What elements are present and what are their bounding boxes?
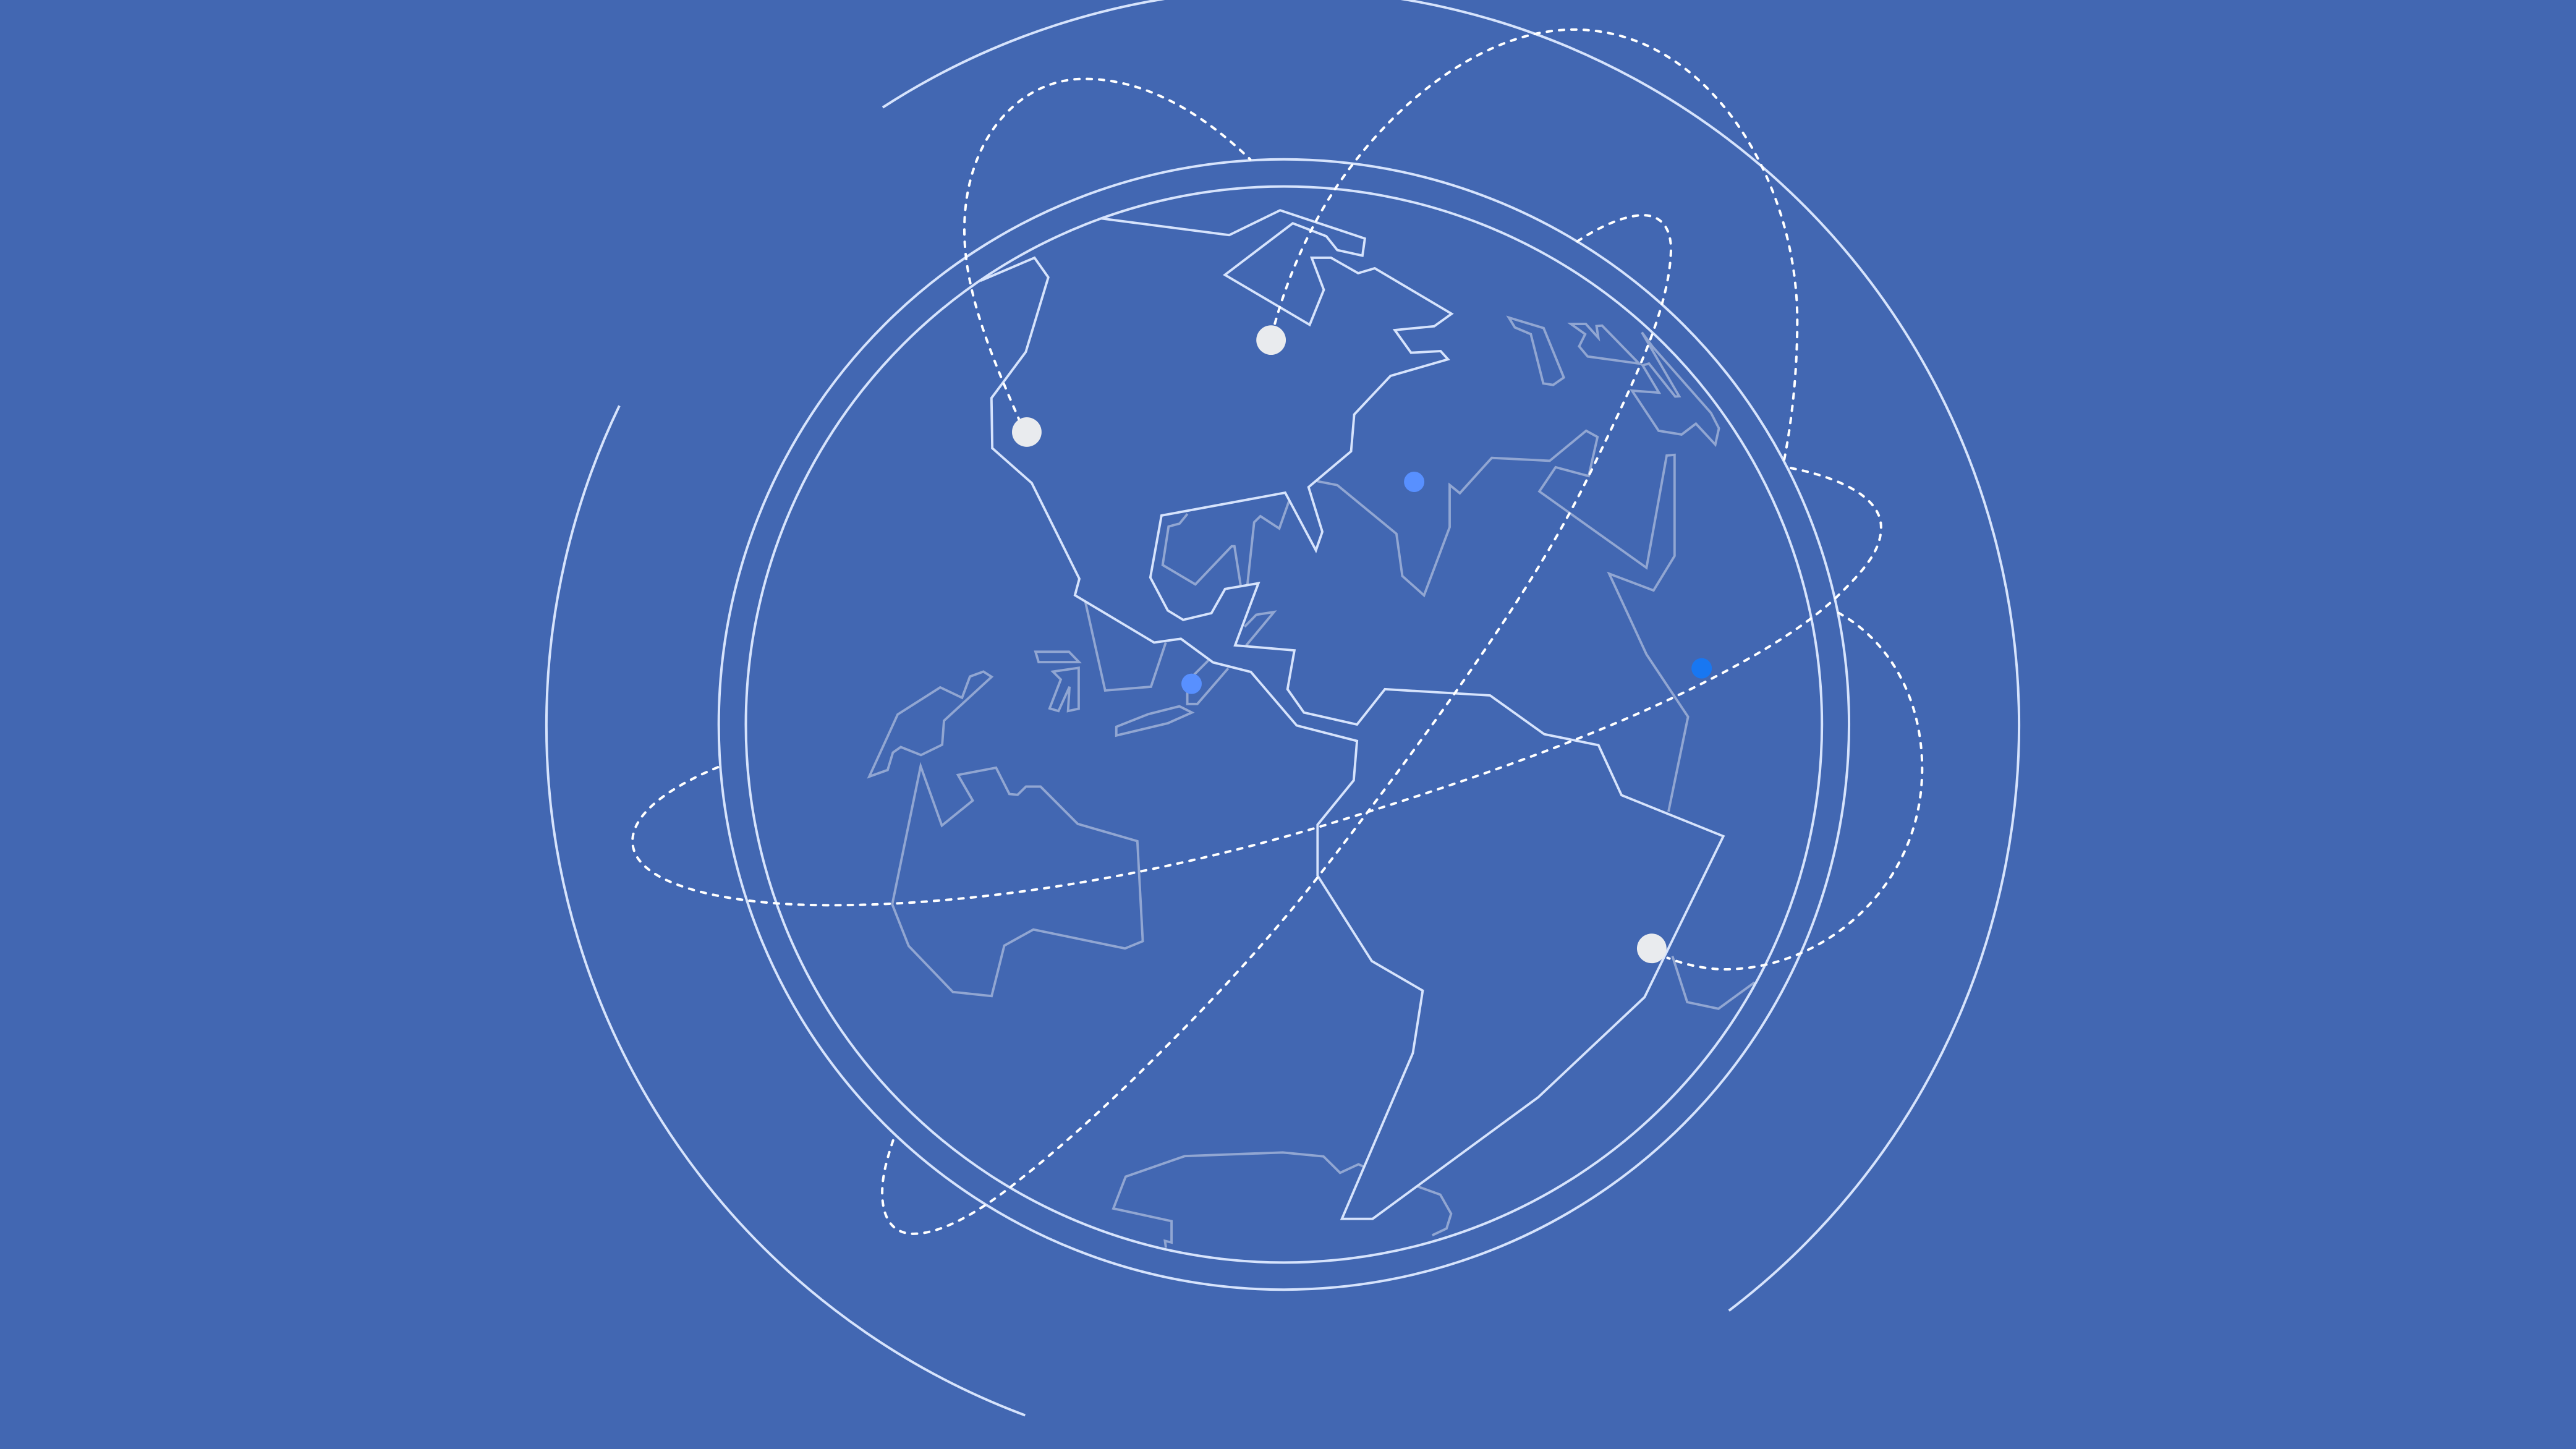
pin: north-west <box>1012 417 1042 447</box>
land: peninsula coast <box>1248 501 1289 584</box>
dashed orbit: north-west pin <box>964 79 1250 422</box>
dot: light blue west <box>1181 674 1202 694</box>
dashed orbit: equatorial <box>632 467 1881 905</box>
island: north B <box>1571 324 1639 363</box>
land: small cape <box>1188 660 1228 704</box>
globe outer ring <box>719 159 1849 1290</box>
land: small island wedge <box>1244 612 1274 645</box>
island: flat bar <box>1035 652 1079 662</box>
land: southern ice west <box>1113 1152 1363 1247</box>
island: north A <box>1509 318 1564 385</box>
island: west large <box>869 671 992 776</box>
island: north C <box>1632 333 1719 444</box>
land: south-east peninsula <box>1086 601 1166 691</box>
dot: light blue north <box>1404 472 1424 492</box>
land: southern ice east <box>1418 1186 1451 1235</box>
dashed orbit: south-east pin <box>1667 613 1922 969</box>
island: long strip <box>1116 707 1192 736</box>
dot: bright blue east <box>1691 658 1712 679</box>
land: southwest continent <box>892 767 1143 996</box>
secondary landmasses <box>869 318 1754 1247</box>
land: south-east coast <box>1672 956 1754 1009</box>
outer arc: bottom left <box>546 406 1025 1416</box>
pin: south-east <box>1637 933 1667 963</box>
globe inner ring <box>746 187 1822 1262</box>
pin: north <box>1256 325 1286 355</box>
land: far continent coast <box>1316 431 1688 812</box>
land: inner bay coast <box>1163 514 1241 585</box>
island: arrow shape <box>1050 668 1079 711</box>
dashed orbit: north pin <box>1275 30 1797 462</box>
dashed orbit: diagonal <box>882 215 1671 1234</box>
outer arc: top right <box>883 0 2019 1311</box>
main continents outline <box>980 210 1724 1219</box>
